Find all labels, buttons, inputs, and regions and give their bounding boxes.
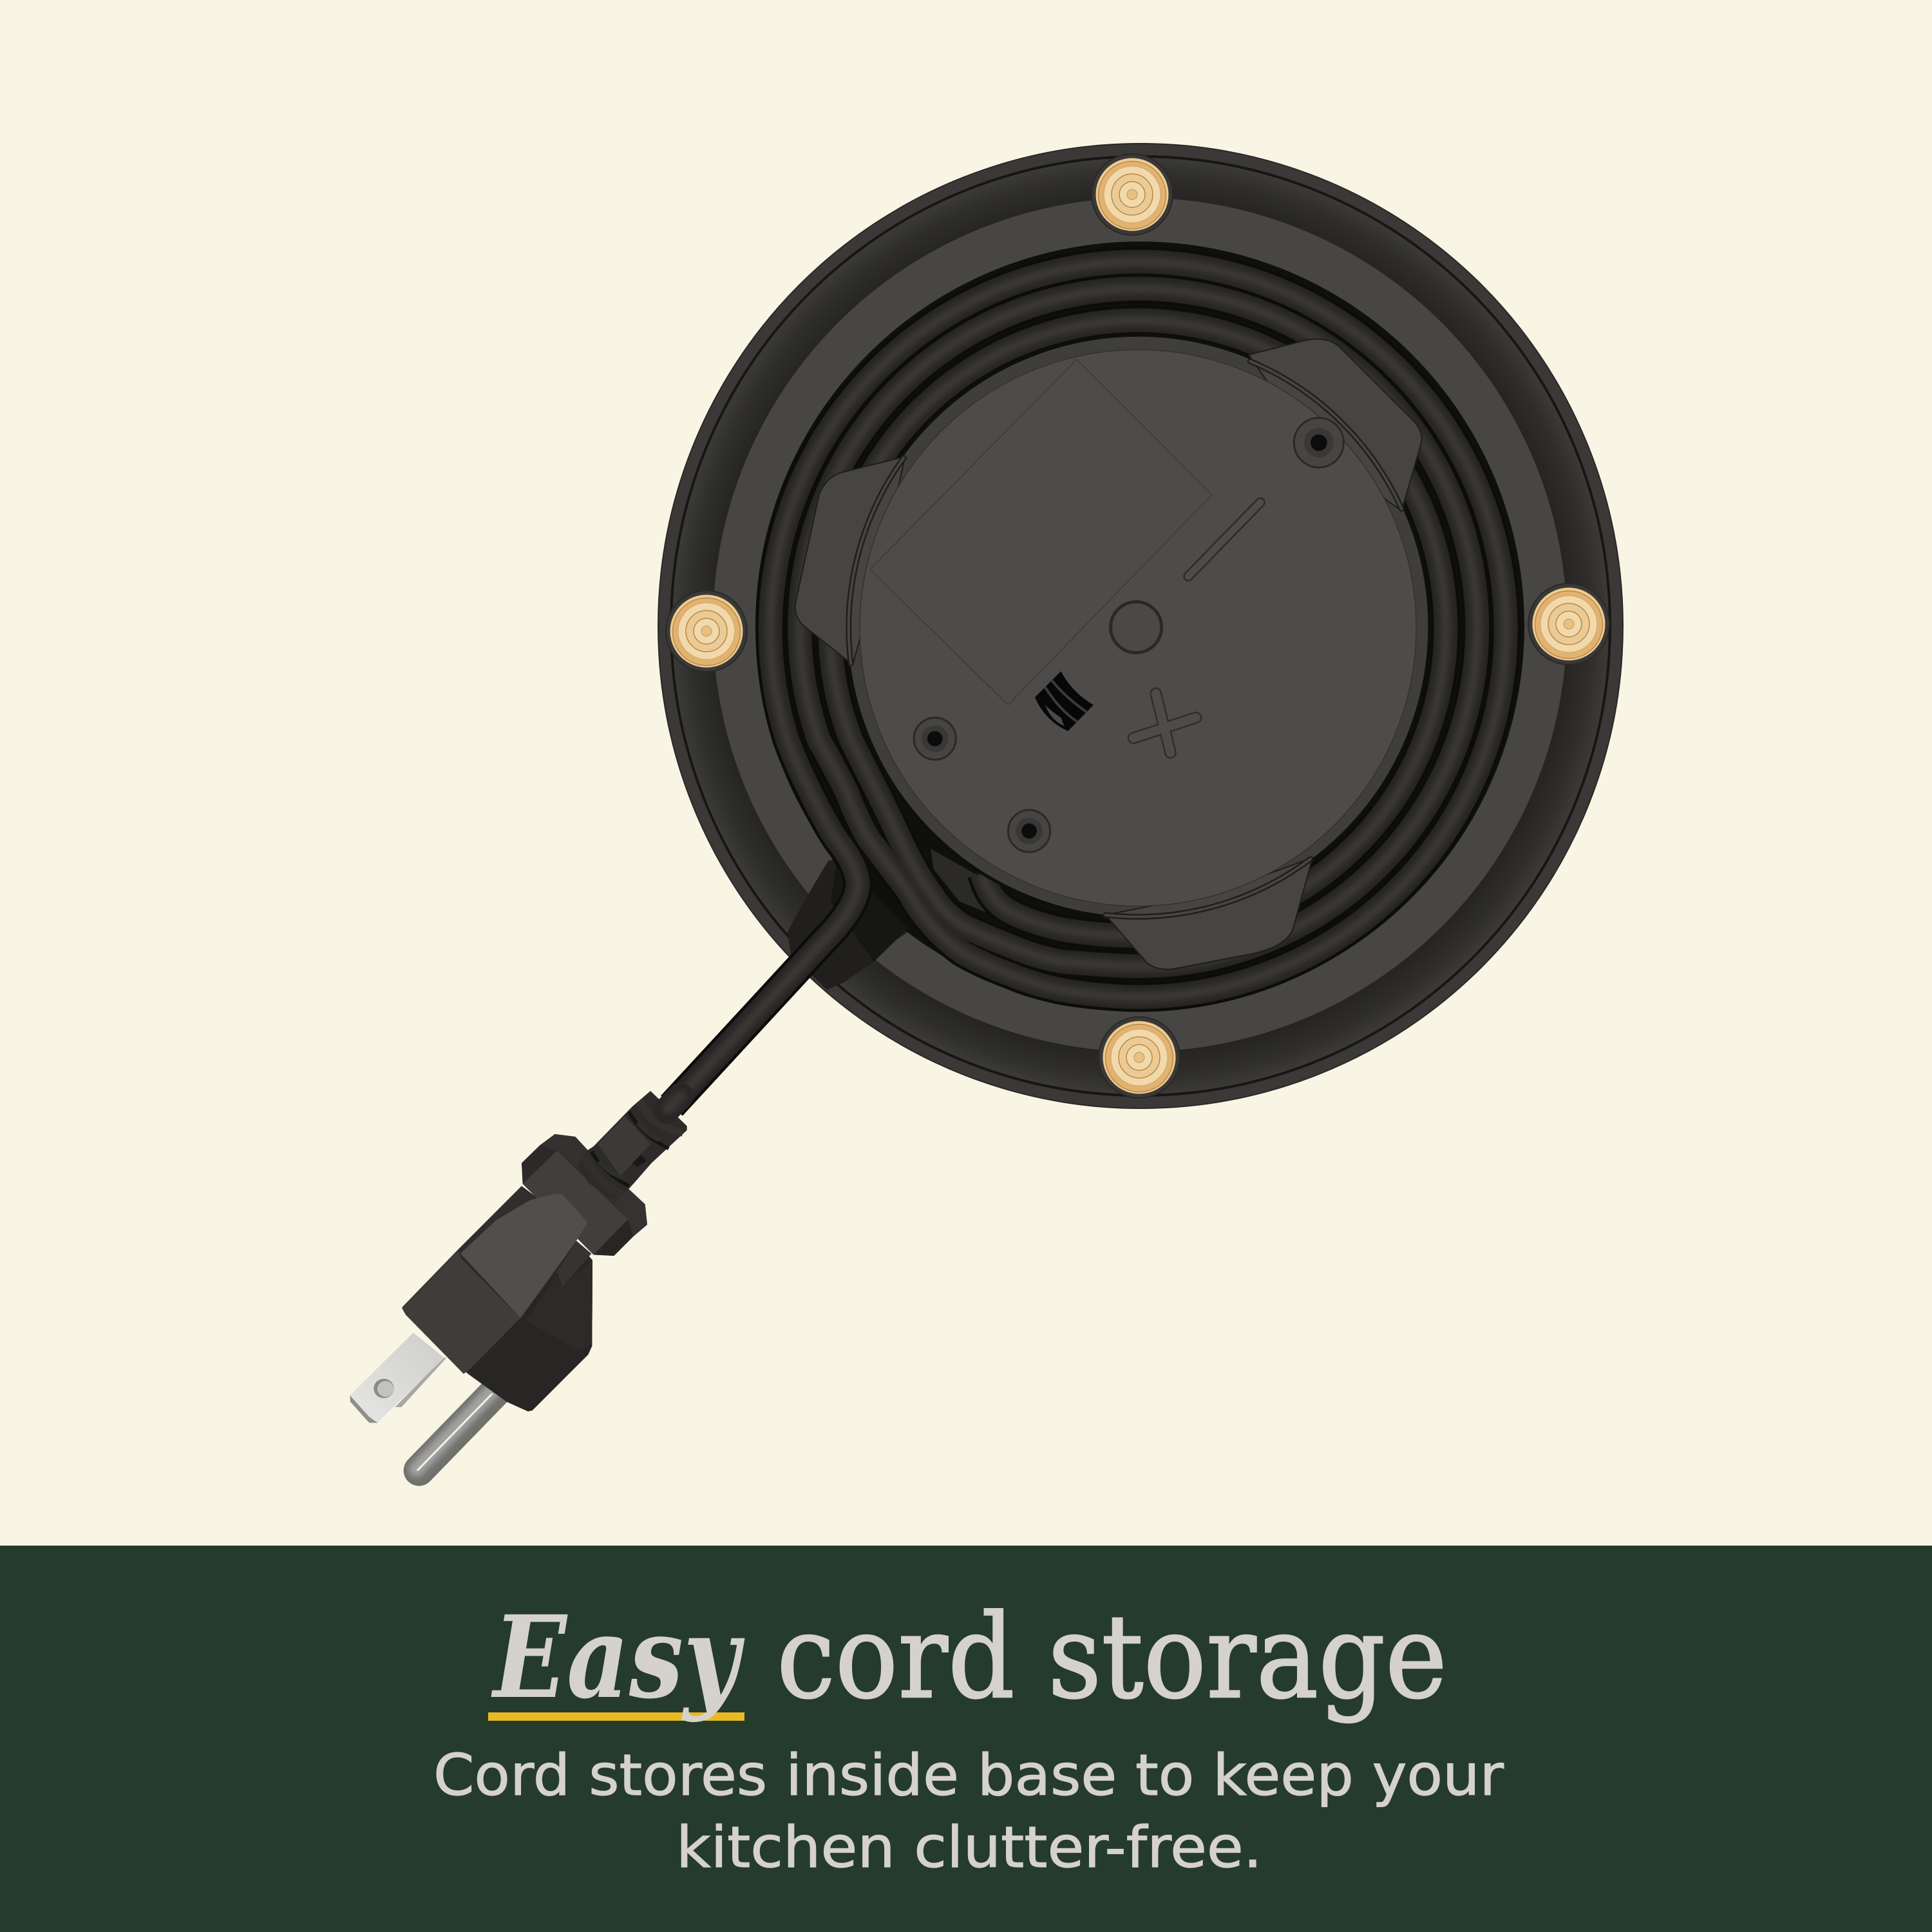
- caption panel: [0, 1546, 1932, 1932]
- screw: bottom: [1008, 810, 1050, 852]
- title: remainder: cord storage: [777, 1590, 1447, 1725]
- title: emphasis word: Easy: [491, 1591, 745, 1724]
- kettle base: [658, 144, 1623, 1108]
- cord channel notch: [788, 850, 914, 990]
- power cord coiled in base: [672, 261, 1506, 1106]
- tab: left: [795, 457, 905, 665]
- connector socket: [1035, 671, 1094, 731]
- tab: top right: [1249, 339, 1422, 511]
- plug collar: [522, 1134, 647, 1256]
- minus mark: [1188, 502, 1260, 576]
- screw: lower left: [914, 717, 956, 760]
- plug prongs and body: [350, 1186, 592, 1470]
- description line 1: Cord stores inside base to keep your: [433, 1742, 1504, 1808]
- description: [433, 1742, 1504, 1880]
- plug body: side face: [402, 1251, 520, 1374]
- plug body: shoulder: [457, 1186, 535, 1254]
- rubber foot: right: [1528, 583, 1609, 665]
- tab slots: [849, 361, 1401, 917]
- base outer ring: [658, 144, 1623, 1108]
- plate surface: [860, 350, 1416, 906]
- tab: bottom: [1106, 858, 1312, 969]
- plus mark: [1133, 694, 1196, 753]
- cord end: [667, 1096, 681, 1110]
- screw: top right: [1294, 418, 1343, 468]
- centre post: [1111, 601, 1162, 653]
- description line 2: kitchen clutter-free.: [676, 1814, 1262, 1880]
- plate rim: [846, 335, 1430, 918]
- rubber foot: bottom: [1099, 1017, 1180, 1098]
- ground pin: [417, 1381, 504, 1470]
- base raised band: [713, 198, 1567, 1052]
- cord cavity: [755, 242, 1524, 1010]
- background: [0, 0, 1932, 1546]
- cord exit shadow: [831, 857, 908, 961]
- plug body: silhouette: [402, 1186, 592, 1412]
- inner support wall: [931, 849, 999, 918]
- rubber foot: top: [1092, 154, 1173, 235]
- label outline: [870, 359, 1212, 705]
- plug body: top face: [460, 1193, 588, 1318]
- plug body: underside: [468, 1260, 592, 1412]
- bottom plate: [795, 335, 1430, 969]
- strain relief: [578, 1091, 687, 1198]
- plug body: inner facet: [557, 1241, 591, 1287]
- underline accent: [488, 1712, 744, 1721]
- base recessed band: [671, 156, 1610, 1095]
- title: [491, 1590, 1447, 1725]
- flat blade: [350, 1332, 446, 1423]
- plug body: underside facet: [526, 1260, 592, 1350]
- rubber foot: left: [666, 591, 747, 672]
